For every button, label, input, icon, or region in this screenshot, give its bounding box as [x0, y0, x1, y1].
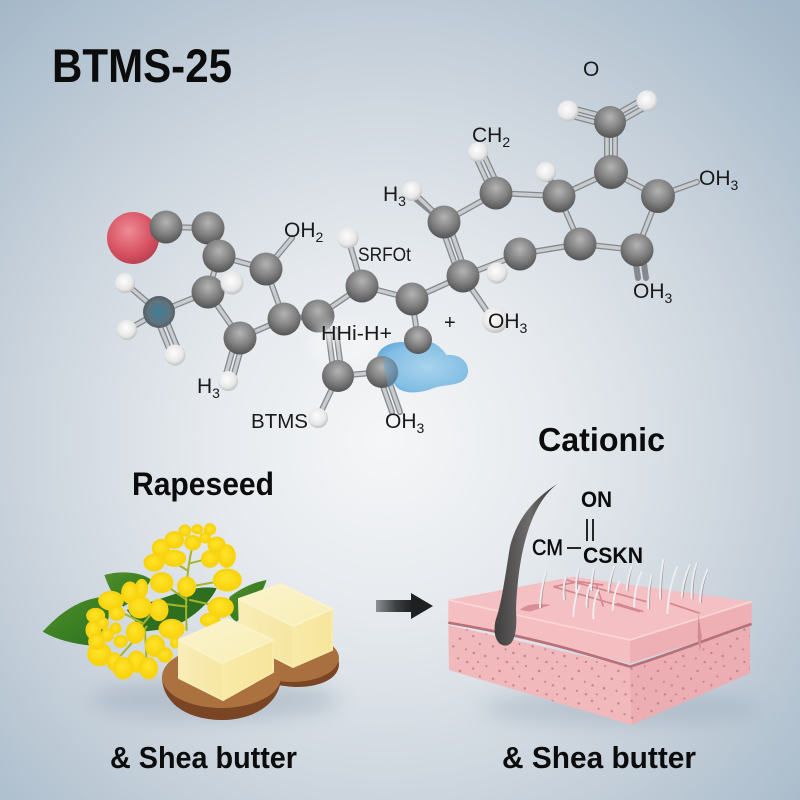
molecule diagram: [107, 58, 738, 436]
front butter cube: [179, 619, 273, 700]
labels: 3: [520, 320, 528, 336]
heading: Rapeseed: Rapeseed: [132, 466, 274, 502]
carbon atoms: [150, 106, 675, 392]
labels: BTMS: [251, 411, 308, 433]
bonds: [125, 97, 697, 418]
large hair: [495, 484, 557, 646]
white glow over carbon: [316, 323, 344, 341]
arrow: [376, 593, 433, 619]
soft glow behind label: [310, 325, 380, 365]
front wooden disc: [162, 646, 281, 720]
labels: H: [383, 183, 398, 206]
back butter cube: [239, 584, 332, 667]
labels: 3: [664, 290, 672, 306]
labels: OH: [284, 219, 316, 242]
title: BTMS-25: [52, 39, 232, 92]
labels: CH: [472, 124, 502, 147]
hydrogen over ring: [220, 272, 244, 294]
illustration: skin cross-section with hair: [448, 484, 760, 725]
labels: HHi-H+: [321, 323, 392, 345]
caption: right: & Shea butter: [502, 740, 696, 775]
caption: left: & Shea butter: [110, 740, 297, 775]
rapeseed flowers: [43, 524, 267, 678]
chemical structure labels: [532, 487, 643, 568]
chemical structure labels: CM: [532, 535, 563, 560]
heading: Cationic: Cationic: [538, 421, 665, 458]
labels: +: [444, 312, 456, 334]
surface grooves: [553, 580, 700, 613]
leaves: [43, 572, 267, 646]
labels: SRFOt: [358, 245, 412, 266]
chemical structure labels: CSKN: [583, 543, 643, 568]
nitrogen atom: [143, 296, 175, 328]
labels: OH: [699, 167, 730, 190]
labels: 3: [212, 385, 220, 401]
labels: H: [197, 375, 212, 398]
labels: 2: [316, 229, 324, 245]
bond lines: [567, 519, 593, 548]
blue charge cloud: [377, 341, 468, 392]
back wooden disc: [245, 634, 339, 687]
chemical structure labels: ON: [581, 487, 612, 512]
stems: [110, 543, 227, 663]
blossoms: [87, 524, 241, 678]
labels: 3: [416, 420, 424, 436]
blue cloud overlap: [384, 357, 399, 388]
illustration: rapeseed flowers and shea butter: [43, 524, 340, 720]
hydrogen atoms: [115, 90, 658, 428]
block shadow: [480, 692, 760, 724]
lower skin layer: [448, 625, 750, 725]
small hairs: [540, 560, 708, 618]
labels: 3: [398, 193, 406, 209]
labels: OH: [633, 280, 664, 303]
labels: O: [583, 58, 599, 81]
labels: OH: [385, 410, 416, 433]
labels: OH: [488, 310, 520, 333]
labels: 3: [730, 177, 738, 193]
shadow: [90, 680, 340, 720]
labels: [197, 58, 738, 436]
labels: 2: [502, 134, 510, 150]
upper skin layer: [448, 577, 752, 667]
oxygen atom: [107, 212, 159, 264]
